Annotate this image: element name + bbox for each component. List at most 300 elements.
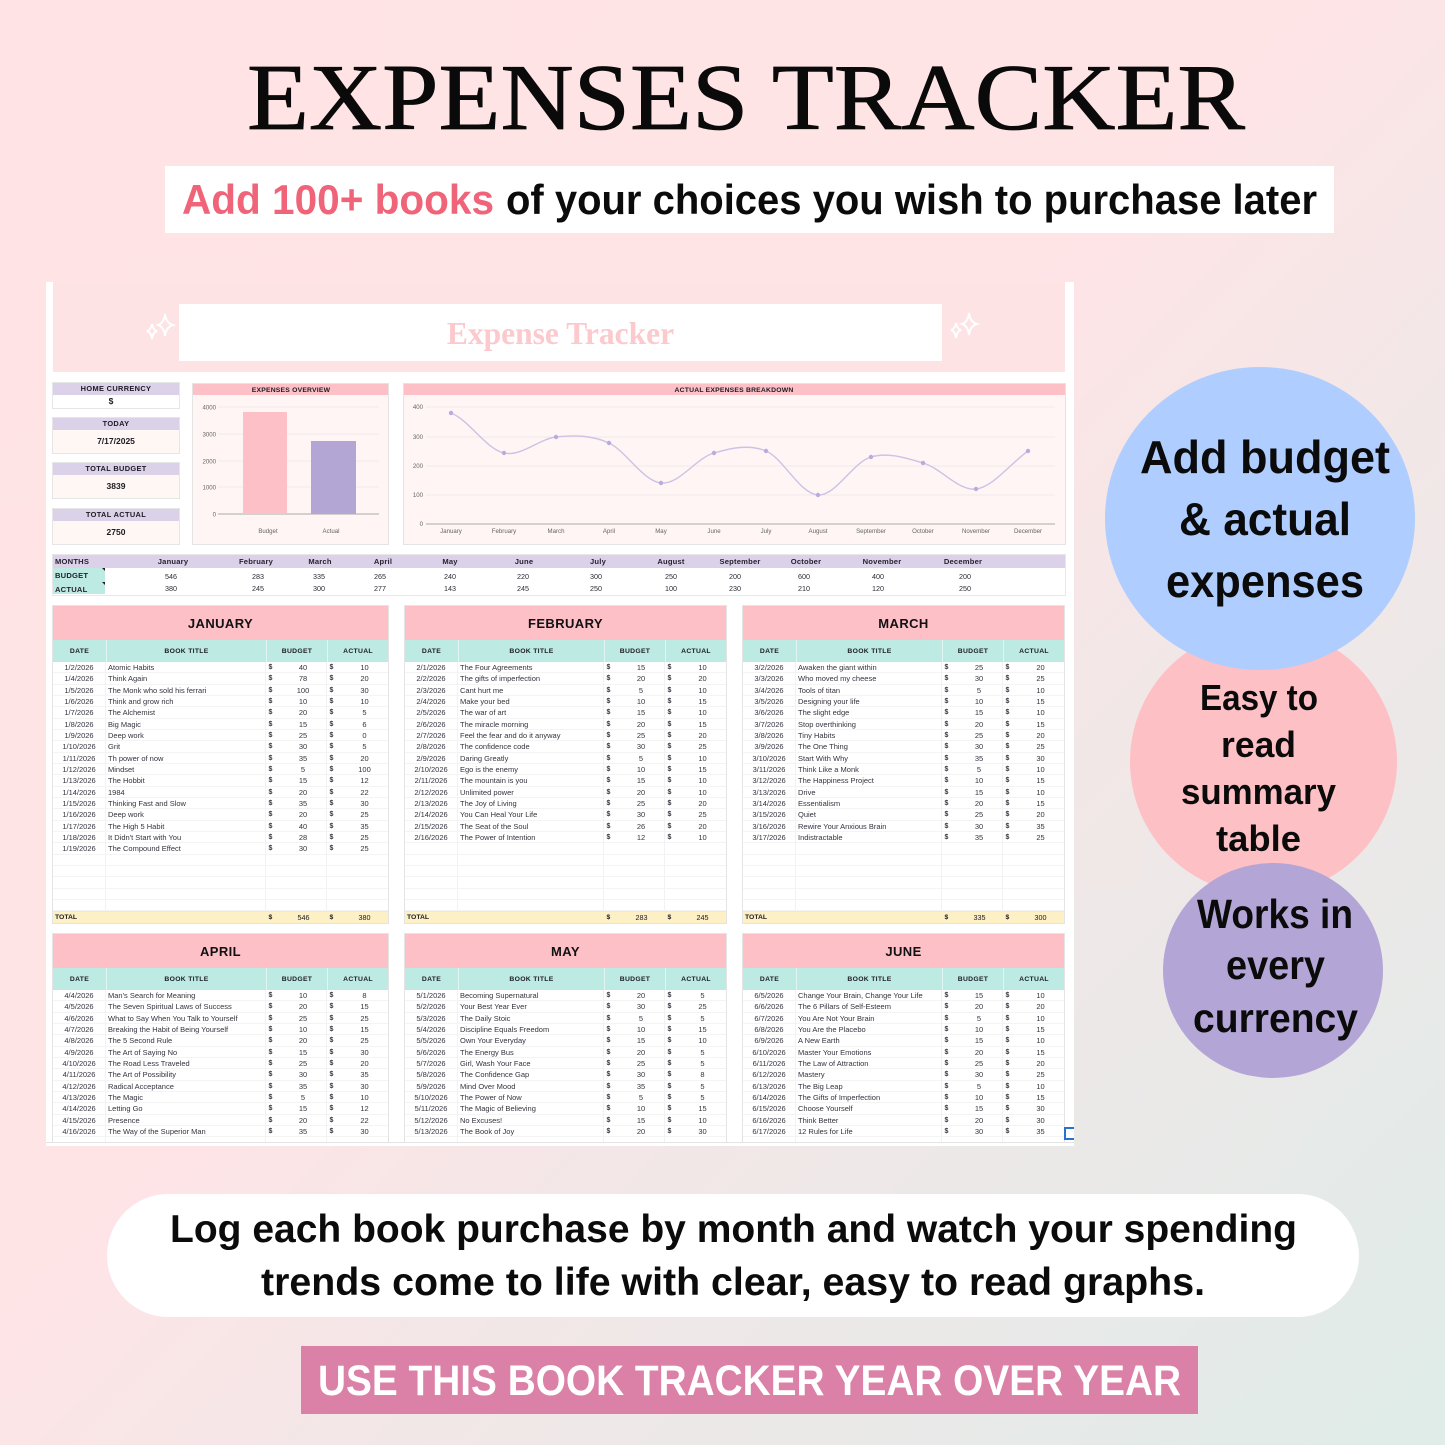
table rows: Change Your Brain, Change Your Life: [798, 991, 923, 1000]
panel: april: [53, 934, 388, 1142]
table rows: 25: [360, 844, 369, 853]
line chart: actual expenses breakdown: March: [548, 528, 564, 535]
table rows: 25: [1036, 674, 1045, 683]
bar chart: expenses overview: EXPENSES OVERVIEW: [252, 387, 331, 394]
table rows: 2/6/2026: [416, 720, 446, 729]
table rows: $: [606, 1083, 610, 1090]
table rows: 8: [700, 1070, 705, 1079]
table rows: 1/12/2026: [62, 765, 96, 774]
table rows: 1/13/2026: [62, 776, 96, 785]
table rows: $: [330, 1015, 333, 1022]
table rows: $: [668, 834, 671, 841]
table rows: $: [1006, 1060, 1009, 1067]
table rows: 20: [698, 731, 707, 740]
table rows: $: [1006, 1037, 1009, 1044]
table rows: $: [1006, 732, 1009, 739]
table rows: $: [668, 1128, 671, 1135]
table rows: 10: [698, 708, 707, 717]
table rows: The One Thing: [798, 742, 848, 751]
table rows: 30: [299, 742, 307, 751]
table rows: $: [330, 1094, 333, 1101]
table rows: Mindset: [108, 765, 134, 774]
table rows: 30: [975, 674, 983, 683]
circle: easy to read summary table: [1130, 650, 1397, 884]
table rows: The gifts of imperfection: [460, 674, 540, 683]
table rows: 20: [360, 754, 369, 763]
table rows: $: [330, 992, 333, 999]
table rows: $: [668, 1026, 671, 1033]
table rows: 30: [1036, 1116, 1045, 1125]
table rows: 5: [362, 742, 367, 751]
table rows: 4/11/2026: [63, 1070, 95, 1079]
card: total budget: 3839: [107, 481, 125, 491]
table rows: 1/2/2026: [64, 663, 94, 672]
line chart: actual expenses breakdown: October: [912, 528, 934, 535]
table rows: Discipline Equals Freedom: [460, 1025, 549, 1034]
table rows: Feel the fear and do it anyway: [460, 731, 560, 740]
table rows: Designing your life: [798, 697, 860, 706]
table rows: $: [268, 766, 272, 773]
panel: june: [743, 934, 1064, 1142]
circle: easy to read summary table: read: [1221, 724, 1296, 765]
summary table: months budget actual: 250: [959, 584, 971, 593]
table rows: 6/12/2026: [752, 1070, 786, 1079]
subtitle banner: [165, 166, 1334, 233]
table rows: 20: [1036, 1002, 1045, 1011]
table rows: Man's Search for Meaning: [108, 991, 195, 1000]
table rows: 5: [977, 686, 981, 695]
table rows: 5: [639, 754, 643, 763]
table rows: $: [1006, 1003, 1009, 1010]
table rows: 5: [977, 1082, 981, 1091]
main title: EXPENSES TRACKER: [247, 46, 1245, 150]
table rows: No Excuses!: [460, 1116, 502, 1125]
table rows: $: [668, 755, 671, 762]
table rows: The Monk who sold his ferrari: [108, 686, 206, 695]
table rows: $: [268, 664, 272, 671]
table rows: 40: [299, 822, 307, 831]
table rows: 1/17/2026: [62, 822, 96, 831]
table rows: $: [1006, 755, 1009, 762]
line chart: actual expenses breakdown: May: [655, 528, 668, 535]
table rows: $: [1006, 1026, 1009, 1033]
circle: works in every currency: [1163, 863, 1383, 1078]
table rows: 1/14/2026: [62, 788, 96, 797]
table rows: 3/8/2026: [754, 731, 784, 740]
table rows: 4/14/2026: [62, 1104, 96, 1113]
table rows: $: [268, 800, 272, 807]
total row: $: [606, 914, 610, 921]
table rows: 10: [698, 663, 707, 672]
table rows: 2/16/2026: [414, 833, 448, 842]
heading: january: JANUARY: [188, 616, 253, 631]
table rows: 20: [637, 1127, 645, 1136]
table rows: $: [944, 709, 948, 716]
summary table: months budget actual: 265: [374, 572, 386, 581]
table rows: 15: [637, 1036, 645, 1045]
table rows: $: [606, 732, 610, 739]
table rows: 5/10/2026: [414, 1093, 448, 1102]
table rows: $: [944, 1037, 948, 1044]
table rows: 12: [637, 833, 645, 842]
table rows: $: [606, 1049, 610, 1056]
summary table: months budget actual: September: [719, 557, 761, 566]
table rows: $: [668, 1117, 671, 1124]
bar chart: expenses overview: 3000: [202, 432, 217, 438]
table rows: 15: [975, 991, 983, 1000]
table rows: 10: [1036, 1082, 1045, 1091]
table rows: 10: [698, 776, 707, 785]
table rows: $: [606, 1015, 610, 1022]
table rows: $: [606, 721, 610, 728]
table rows: 30: [637, 742, 645, 751]
table rows: $: [668, 1071, 671, 1078]
table rows: 15: [1036, 799, 1045, 808]
summary table: months budget actual: 283: [252, 572, 264, 581]
table rows: Essentialism: [798, 799, 840, 808]
circle: add budget and actual expenses: Add budget: [1140, 431, 1390, 483]
table rows: $: [330, 811, 333, 818]
table rows: $: [668, 800, 671, 807]
heading: january: [53, 606, 388, 640]
bar chart: expenses overview: 4000: [202, 404, 217, 412]
table rows: $: [1006, 789, 1009, 796]
table rows: Think Again: [108, 674, 147, 683]
table rows: The Daily Stoic: [460, 1014, 510, 1023]
card: total actual: TOTAL ACTUAL: [86, 510, 146, 519]
card: total budget: [53, 463, 179, 498]
table rows: Your Best Year Ever: [460, 1002, 527, 1011]
table rows: 20: [637, 720, 645, 729]
table rows: $: [1006, 777, 1009, 784]
table rows: Letting Go: [108, 1104, 143, 1113]
table rows: $: [668, 823, 671, 830]
subtitle banner: of your choices you wish to purchase later: [506, 176, 1317, 223]
table rows: Think and grow rich: [108, 697, 173, 706]
summary table: months budget actual: 300: [313, 584, 325, 593]
table rows: $: [668, 992, 671, 999]
table rows: 4/9/2026: [64, 1048, 94, 1057]
table rows: 25: [360, 810, 369, 819]
table rows: $: [606, 789, 610, 796]
table rows: 4/10/2026: [62, 1059, 96, 1068]
table rows: $: [330, 721, 333, 728]
table rows: 10: [698, 686, 707, 695]
table rows: 40: [299, 663, 307, 672]
table rows: $: [268, 834, 272, 841]
table header: DATE: [70, 976, 89, 983]
table header: [405, 968, 726, 990]
table rows: The Gifts of Imperfection: [798, 1093, 880, 1102]
table rows: 15: [360, 1025, 369, 1034]
table rows: 10: [360, 697, 369, 706]
circle: easy to read summary table: Easy to: [1200, 677, 1318, 718]
line chart: actual expenses breakdown: ACTUAL EXPENSES BREAKDOWN: [675, 387, 793, 394]
table rows: $: [944, 1049, 948, 1056]
table rows: 30: [637, 1002, 645, 1011]
table rows: $: [330, 845, 333, 852]
table rows: Unlimited power: [460, 788, 514, 797]
summary table: months budget actual: 220: [517, 572, 529, 581]
table rows: $: [1006, 698, 1009, 705]
icon: sparkles right: [950, 313, 980, 338]
table rows: 25: [299, 1059, 307, 1068]
summary table: months budget actual: 250: [665, 572, 677, 581]
table rows: 15: [975, 788, 983, 797]
line chart: actual expenses breakdown: 200: [413, 463, 424, 470]
table rows: $: [330, 1117, 333, 1124]
table rows: 20: [698, 822, 707, 831]
table rows: 5: [700, 1082, 705, 1091]
table rows: $: [268, 709, 272, 716]
table rows: 2/13/2026: [414, 799, 448, 808]
table rows: 25: [1036, 1070, 1045, 1079]
table rows: 12: [360, 776, 369, 785]
table rows: $: [268, 1071, 272, 1078]
line chart: actual expenses breakdown: December: [1014, 528, 1042, 535]
table rows: $: [944, 834, 948, 841]
table rows: 25: [975, 1059, 983, 1068]
table rows: $: [268, 755, 272, 762]
table rows: $: [606, 777, 610, 784]
summary table: months budget actual: 100: [665, 584, 677, 593]
table rows: 20: [637, 991, 645, 1000]
table rows: $: [268, 1083, 272, 1090]
line chart: actual expenses breakdown: November: [962, 528, 990, 535]
table rows: $: [268, 992, 272, 999]
table rows: $: [268, 698, 272, 705]
table rows: $: [944, 1117, 948, 1124]
table rows: $: [1006, 766, 1009, 773]
table rows: 15: [975, 708, 983, 717]
table rows: The 5 Second Rule: [108, 1036, 172, 1045]
table header: BUDGET: [958, 648, 988, 655]
summary table: months budget actual: October: [791, 557, 821, 566]
table rows: 15: [1036, 1093, 1045, 1102]
table rows: A New Earth: [798, 1036, 840, 1045]
table rows: 15: [299, 776, 307, 785]
table rows: [405, 990, 726, 1142]
table rows: 1/15/2026: [62, 799, 96, 808]
table rows: $: [606, 1026, 610, 1033]
table rows: $: [330, 709, 333, 716]
table rows: 10: [637, 1104, 645, 1113]
table rows: 15: [1036, 1048, 1045, 1057]
panel: march: [743, 606, 1064, 923]
table rows: 25: [1036, 742, 1045, 751]
table rows: 20: [299, 708, 307, 717]
table rows: 20: [299, 1036, 307, 1045]
bar chart: expenses overview: 0: [213, 512, 217, 518]
table rows: $: [1006, 687, 1009, 694]
table rows: $: [668, 1060, 671, 1067]
summary table: months budget actual: January: [158, 557, 189, 566]
table rows: $: [1006, 1117, 1009, 1124]
bar chart: expenses overview: 1000: [202, 484, 217, 492]
summary table: months budget actual: 210: [798, 584, 810, 593]
table rows: 1/16/2026: [62, 810, 96, 819]
table rows: $: [668, 1094, 671, 1101]
table rows: $: [330, 1071, 333, 1078]
table rows: 5/2/2026: [416, 1002, 446, 1011]
table rows: 10: [975, 1093, 983, 1102]
table rows: 20: [299, 788, 307, 797]
summary table: months budget actual: July: [590, 557, 607, 566]
heading: april: APRIL: [200, 944, 241, 959]
table rows: 1/19/2026: [62, 844, 96, 853]
table rows: $: [330, 743, 333, 750]
table rows: The High 5 Habit: [108, 822, 164, 831]
table rows: $: [944, 755, 948, 762]
table rows: 10: [1036, 1014, 1045, 1023]
table rows: $: [944, 800, 948, 807]
table rows: $: [668, 675, 671, 682]
table header: BOOK TITLE: [847, 976, 892, 983]
table rows: $: [668, 766, 671, 773]
table rows: 10: [975, 776, 983, 785]
table rows: Make your bed: [460, 697, 510, 706]
table rows: $: [330, 664, 333, 671]
table rows: $: [1006, 823, 1009, 830]
table rows: 35: [975, 833, 983, 842]
table rows: 4/5/2026: [64, 1002, 94, 1011]
table rows: 35: [299, 1082, 307, 1091]
total row: 283: [636, 913, 648, 922]
table header: BUDGET: [620, 648, 650, 655]
table rows: $: [268, 1128, 272, 1135]
table rows: $: [606, 1003, 610, 1010]
table rows: 20: [360, 1059, 369, 1068]
card: home currency: $: [109, 396, 113, 406]
table rows: 25: [637, 1059, 645, 1068]
table rows: $: [668, 1105, 671, 1112]
table rows: 1/18/2026: [62, 833, 96, 842]
title box: Expense Tracker: [447, 316, 674, 351]
table rows: 5: [700, 991, 705, 1000]
table rows: 2/9/2026: [416, 754, 446, 763]
table rows: Think Better: [798, 1116, 838, 1125]
table rows: 5/3/2026: [416, 1014, 446, 1023]
table rows: 3/6/2026: [754, 708, 784, 717]
table rows: 25: [975, 731, 983, 740]
table rows: $: [330, 698, 333, 705]
table rows: The Magic of Believing: [460, 1104, 536, 1113]
table rows: 20: [975, 1048, 983, 1057]
table rows: $: [606, 1037, 610, 1044]
table rows: $: [268, 845, 272, 852]
table rows: $: [944, 664, 948, 671]
table rows: $: [268, 1049, 272, 1056]
table rows: $: [944, 766, 948, 773]
table rows: $: [668, 721, 671, 728]
table rows: 20: [637, 674, 645, 683]
table rows: $: [606, 1094, 610, 1101]
table rows: 10: [637, 1025, 645, 1034]
table rows: 25: [698, 1002, 707, 1011]
table rows: $: [330, 1003, 333, 1010]
icon: sparkles left: [146, 314, 176, 339]
table rows: 2/10/2026: [414, 765, 448, 774]
table rows: 25: [1036, 833, 1045, 842]
table rows: 15: [698, 720, 707, 729]
table rows: $: [1006, 1015, 1009, 1022]
card: home currency: HOME CURRENCY: [81, 384, 151, 393]
total row: [53, 911, 388, 923]
table rows: 10: [299, 991, 307, 1000]
summary table: months budget actual: March: [308, 557, 332, 566]
table rows: 15: [975, 1036, 983, 1045]
heading: february: FEBRUARY: [528, 616, 603, 631]
heading: march: MARCH: [878, 616, 929, 631]
table rows: 15: [1036, 776, 1045, 785]
bar chart: expenses overview: Budget: [258, 528, 278, 535]
table rows: $: [268, 1015, 272, 1022]
table rows: 10: [1036, 991, 1045, 1000]
table rows: $: [944, 1015, 948, 1022]
table rows: 5: [301, 1093, 305, 1102]
table header: BOOK TITLE: [509, 976, 554, 983]
table rows: The Road Less Traveled: [108, 1059, 190, 1068]
table rows: 35: [299, 799, 307, 808]
table rows: $: [606, 1117, 610, 1124]
line chart: actual expenses breakdown: September: [856, 528, 886, 535]
table rows: 30: [360, 686, 369, 695]
circle: easy to read summary table: table: [1216, 818, 1301, 859]
summary table: months budget actual: 245: [517, 584, 529, 593]
table rows: 20: [698, 799, 707, 808]
table rows: The Way of the Superior Man: [108, 1127, 206, 1136]
table rows: $: [1006, 1105, 1009, 1112]
table rows: 25: [698, 742, 707, 751]
table rows: 15: [698, 1025, 707, 1034]
table rows: 25: [360, 833, 369, 842]
table rows: 6/13/2026: [752, 1082, 786, 1091]
summary table: months budget actual: 600: [798, 572, 810, 581]
table rows: $: [268, 823, 272, 830]
table rows: Thinking Fast and Slow: [108, 799, 186, 808]
table rows: $: [944, 992, 948, 999]
table rows: $: [1006, 1049, 1009, 1056]
table rows: $: [1006, 1094, 1009, 1101]
table rows: $: [944, 1094, 948, 1101]
panel: january: [53, 606, 388, 923]
heading: may: MAY: [551, 944, 580, 959]
table rows: 20: [975, 1002, 983, 1011]
table rows: The Seat of the Soul: [460, 822, 528, 831]
table rows: 5/5/2026: [416, 1036, 446, 1045]
table rows: 3/10/2026: [752, 754, 786, 763]
table rows: 15: [698, 697, 707, 706]
table rows: $: [606, 743, 610, 750]
table rows: 10: [360, 1093, 369, 1102]
table rows: 3/4/2026: [754, 686, 784, 695]
table rows: $: [606, 823, 610, 830]
table rows: 4/12/2026: [62, 1082, 96, 1091]
table rows: $: [1006, 800, 1009, 807]
table rows: 35: [637, 1082, 645, 1091]
table rows: 2/8/2026: [416, 742, 446, 751]
table rows: 6/11/2026: [753, 1059, 785, 1068]
table rows: $: [606, 755, 610, 762]
table rows: Breaking the Habit of Being Yourself: [108, 1025, 228, 1034]
heading: may: [405, 934, 726, 968]
table rows: The mountain is you: [460, 776, 528, 785]
table rows: $: [268, 1094, 272, 1101]
summary table: months budget actual: 240: [444, 572, 456, 581]
table rows: 1/6/2026: [64, 697, 94, 706]
circle: add budget and actual expenses: & actual: [1179, 493, 1351, 545]
table rows: 26: [637, 822, 645, 831]
